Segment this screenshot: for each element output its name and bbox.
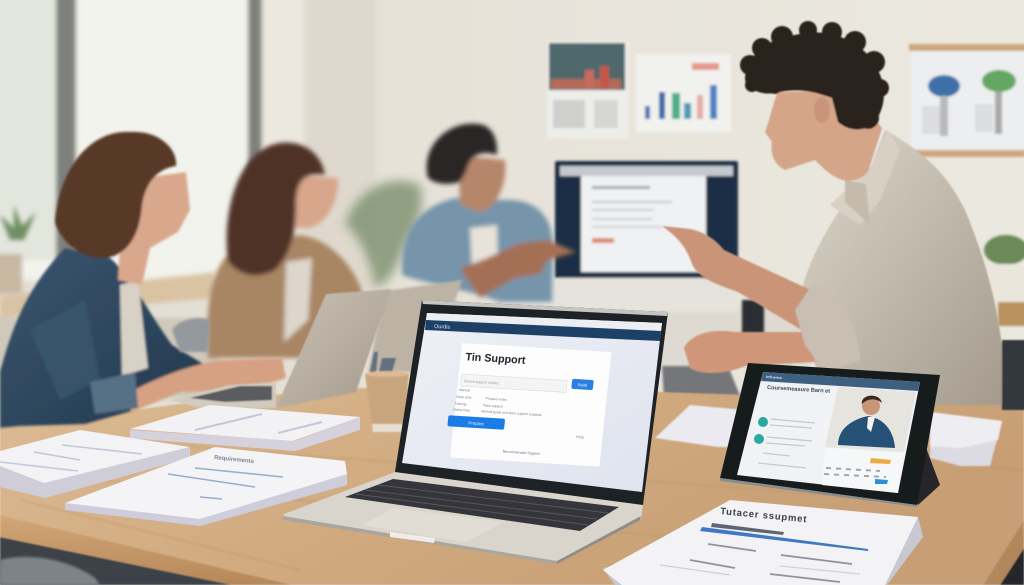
tablet heading: Coursemeasure Barn et bbox=[767, 385, 830, 395]
potted plant: centre behind man bbox=[345, 181, 422, 288]
paper cup with pens bbox=[365, 352, 409, 432]
laptop nav text: Ourdis bbox=[434, 324, 451, 331]
support card: Build bbox=[578, 382, 587, 388]
teal icons bbox=[758, 417, 768, 427]
card footer: Recommended Support bbox=[503, 450, 540, 456]
tablet screen bbox=[737, 372, 920, 493]
form rows: Training bbox=[454, 402, 467, 406]
potted plant: right bbox=[984, 235, 1024, 326]
dark mug on back desk bbox=[742, 300, 764, 340]
back laptops on the table bbox=[368, 280, 741, 400]
person: young man with curly hair, right bbox=[662, 21, 1024, 410]
card heading: Tin Support bbox=[465, 351, 526, 367]
document title: Requirements bbox=[214, 455, 255, 465]
person: woman in tan jacket bbox=[207, 143, 364, 358]
more button: Help bbox=[576, 434, 585, 440]
laptop base bbox=[283, 472, 643, 563]
document title: Tutacer ssupmet bbox=[720, 506, 808, 525]
monitor on back desk bbox=[555, 161, 738, 312]
form rows: Manual guide and team support requests bbox=[481, 409, 542, 417]
form rows: Team support bbox=[483, 403, 503, 409]
prepare button bbox=[447, 415, 505, 430]
document stack: back centre-left bbox=[130, 405, 360, 451]
pointing arm and hand bbox=[662, 226, 815, 335]
laptop screen bbox=[402, 313, 662, 492]
apply button bbox=[571, 379, 594, 390]
keyboard bbox=[345, 479, 619, 531]
resting arm and hand bbox=[684, 331, 815, 373]
trackpad bbox=[362, 508, 503, 542]
search field bbox=[460, 374, 567, 392]
support card: Prepare bbox=[468, 420, 485, 426]
wall poster: report with bars bbox=[547, 41, 629, 139]
instructor in video bbox=[838, 396, 895, 448]
chair near second woman bbox=[172, 318, 210, 352]
form rows: Online help bbox=[453, 408, 470, 413]
person: woman in denim jacket, left bbox=[0, 132, 286, 428]
tablet schedule panel bbox=[822, 448, 904, 493]
highlighted rule lines bbox=[711, 523, 784, 535]
form rows: Manual bbox=[459, 388, 470, 393]
document stack: left bbox=[0, 430, 190, 498]
tablet nav text: Influence bbox=[766, 375, 782, 380]
support card bbox=[444, 343, 611, 467]
table top bbox=[0, 388, 1024, 585]
wall poster: bar chart bbox=[636, 54, 731, 132]
tablet body bbox=[720, 363, 940, 505]
chair under table bbox=[0, 557, 100, 585]
person: man in denim shirt, centre bbox=[402, 124, 576, 302]
form rows bbox=[453, 388, 544, 417]
support card: Search support articles bbox=[464, 379, 499, 385]
face and neck bbox=[765, 90, 882, 181]
room background: wall, window, pillar bbox=[0, 0, 1024, 430]
tablet on folding stand bbox=[720, 363, 940, 507]
silver laptop of woman on left bbox=[170, 289, 391, 408]
document stack: front right bbox=[603, 500, 923, 585]
main laptop bbox=[283, 300, 668, 564]
curly hair bbox=[740, 21, 889, 130]
document stack: front-centre bbox=[65, 447, 347, 526]
potted plant: left windowsill bbox=[0, 205, 36, 294]
laptop lid and bezel bbox=[395, 300, 668, 505]
tablet photo panel bbox=[825, 387, 916, 452]
stand bbox=[910, 445, 940, 505]
form rows: Prepare notes bbox=[485, 397, 507, 402]
document stack: behind tablet bbox=[655, 405, 1002, 466]
form rows: Desk area bbox=[456, 395, 472, 400]
wall poster: hanging diagram bbox=[909, 44, 1024, 157]
